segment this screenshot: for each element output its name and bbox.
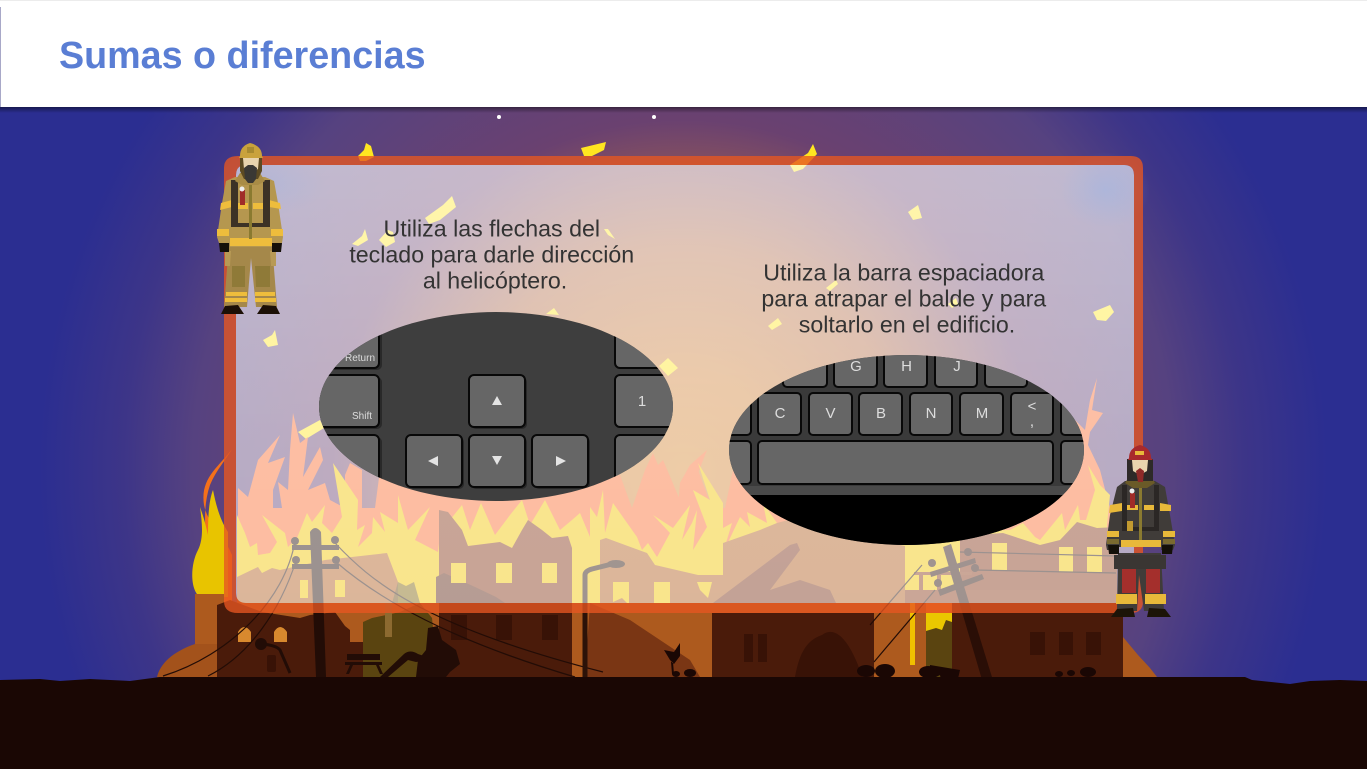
- central ruined building (lower): [439, 603, 572, 677]
- collapsed house roof and rubble (upper): [697, 543, 836, 625]
- instruction text: space bar: soltarlo en el edificio.: [799, 312, 1015, 338]
- central building upper windows: [451, 563, 557, 583]
- key: arrow left: [406, 435, 464, 489]
- keyboard ellipse: arrow keys: [319, 312, 673, 501]
- knee pads: [232, 266, 270, 287]
- key row 1: J: [953, 358, 961, 375]
- key row 2: V: [825, 405, 836, 422]
- keyboard lower lip: [725, 486, 1090, 495]
- front seam: [1139, 485, 1142, 540]
- arched windows: [238, 627, 287, 642]
- coat hem stripe: [230, 238, 272, 246]
- chest stripes: [1127, 505, 1154, 510]
- back building right-of-centre (upper): [600, 517, 905, 603]
- key: lower left: [326, 434, 382, 479]
- coat hem stripe: [1121, 540, 1161, 547]
- key: arrow down: [469, 435, 527, 489]
- instruction text: space bar: Utiliza la barra espaciadora: [763, 260, 1044, 286]
- knee pads: [1122, 569, 1160, 593]
- rubble mound in front of house: [795, 632, 862, 677]
- key row 2: M: [976, 405, 988, 422]
- key: arrow right: [532, 435, 590, 489]
- olive ruin with yellow glow: [363, 603, 438, 677]
- instruction text: space bar: para atrapar el balde y para: [761, 286, 1046, 312]
- pant stripes: [1116, 594, 1166, 604]
- key row 1: [782, 355, 1028, 388]
- key: arrow up: [469, 375, 527, 429]
- boots: [221, 305, 280, 314]
- key: Shift: [319, 374, 382, 429]
- instruction text: arrows: Utiliza las flechas del: [384, 216, 600, 242]
- rail platform: [905, 572, 1117, 603]
- key: numeric 1: [614, 374, 673, 428]
- instruction text: arrows: teclado para darle dirección: [349, 242, 634, 268]
- street lamp left: [255, 638, 290, 673]
- key: right top: [614, 336, 658, 369]
- key row 1: G: [850, 358, 862, 375]
- boots: [1111, 608, 1171, 617]
- legs: [1117, 553, 1164, 611]
- dark building left: [217, 600, 393, 677]
- harness: [231, 180, 270, 227]
- firefighter: tan suit: [217, 143, 283, 314]
- fallen tree: [380, 626, 460, 677]
- instruction text: arrows: al helicóptero.: [423, 268, 567, 294]
- key: Return: [332, 334, 382, 370]
- embers: [263, 115, 1114, 439]
- hood: [1127, 459, 1153, 481]
- hood: [240, 157, 262, 179]
- bench: [345, 654, 383, 674]
- helmet: [239, 143, 263, 158]
- rubble stones: [672, 664, 1096, 700]
- helmet badge: [247, 147, 254, 153]
- central building lower windows: [451, 615, 558, 640]
- key row 2: N: [926, 405, 936, 422]
- harness: [1122, 485, 1159, 531]
- back building left (upper): [237, 553, 398, 603]
- ground: [0, 677, 1367, 769]
- key: Shift: Shift: [352, 411, 372, 422]
- title: Sumas o diferencias: [59, 34, 426, 76]
- bird silhouette: [664, 643, 680, 674]
- house windows: [744, 634, 767, 662]
- radio: [1130, 488, 1134, 494]
- right building lower: [952, 603, 1123, 677]
- panel border: [224, 156, 1143, 613]
- sleeve stripes: [1107, 503, 1175, 537]
- tilted pole right: [928, 544, 995, 690]
- yellow windows in back buildings: [300, 580, 712, 605]
- lower burning window: [926, 603, 952, 677]
- right mounds: [585, 603, 700, 677]
- panel: [215, 152, 1150, 613]
- gloves: [1108, 545, 1173, 554]
- name patch: [1127, 521, 1133, 531]
- flames: outer left yellow: [192, 490, 228, 597]
- sleeve cuffs: [1107, 539, 1175, 544]
- mask: [244, 165, 257, 183]
- key row 2: C: [775, 405, 786, 422]
- key: Return: Return: [345, 353, 375, 364]
- central ruined building (upper): [439, 510, 572, 603]
- legs: [224, 243, 277, 307]
- red tag: [1130, 493, 1135, 508]
- keyboard base black: [750, 495, 1063, 545]
- right ruined buildings (upper): [960, 522, 1117, 603]
- central building rubble front: [436, 573, 505, 603]
- red tag: [240, 190, 245, 205]
- utility pole left: [291, 528, 340, 677]
- flames: outer left tongue: [203, 449, 232, 605]
- key row 2: [710, 393, 1101, 435]
- chest stripes: [237, 203, 264, 209]
- yellow strip: [910, 603, 915, 665]
- flames: front layer: [237, 463, 1110, 603]
- panel translucent fill: [236, 165, 1134, 603]
- mask: [1136, 468, 1144, 482]
- key row 1: H: [901, 358, 912, 375]
- header bar: [0, 0, 1367, 113]
- panel corner speckle left: [215, 155, 325, 215]
- front seam: [249, 185, 252, 239]
- rubble mound left: [157, 644, 222, 677]
- collar: [235, 173, 265, 185]
- face: [243, 158, 259, 173]
- hip pockets: [1114, 555, 1166, 569]
- collapsed house: [712, 613, 874, 677]
- mid brown base: [195, 594, 1157, 677]
- coat: [217, 177, 283, 247]
- helmet: [1128, 445, 1153, 460]
- hip pockets: [225, 251, 276, 266]
- radio: [240, 186, 244, 192]
- right building windows: [1030, 632, 1101, 655]
- keyboard ellipse: space bar: [729, 355, 1084, 545]
- flames: back layer: [238, 378, 1115, 603]
- key row 2: B: [876, 405, 886, 422]
- key row 3 with space bar: [710, 441, 1101, 484]
- right upper windows: [992, 543, 1102, 572]
- street lamp centre: [585, 564, 612, 677]
- pant stripes: [225, 292, 276, 302]
- panel corner speckle right: [1060, 152, 1150, 228]
- coat: [1106, 481, 1175, 550]
- firefighter: dark suit: [1106, 445, 1175, 617]
- key row 2: <: [1028, 398, 1037, 415]
- key: numeric 1: 1: [638, 393, 646, 410]
- burning window behind rails: [910, 546, 952, 592]
- olive ruin upper: [392, 582, 420, 603]
- helmet badge: [1135, 451, 1144, 455]
- power lines: [163, 541, 1116, 677]
- face: [1132, 460, 1148, 475]
- gloves: [219, 243, 282, 252]
- key: right bottom: [614, 434, 666, 477]
- collar: [1125, 475, 1155, 488]
- lattice tower: [385, 603, 392, 637]
- sleeve stripes: [217, 200, 283, 236]
- burning city scene: [0, 378, 1367, 769]
- key row 2: ,: [1030, 413, 1034, 430]
